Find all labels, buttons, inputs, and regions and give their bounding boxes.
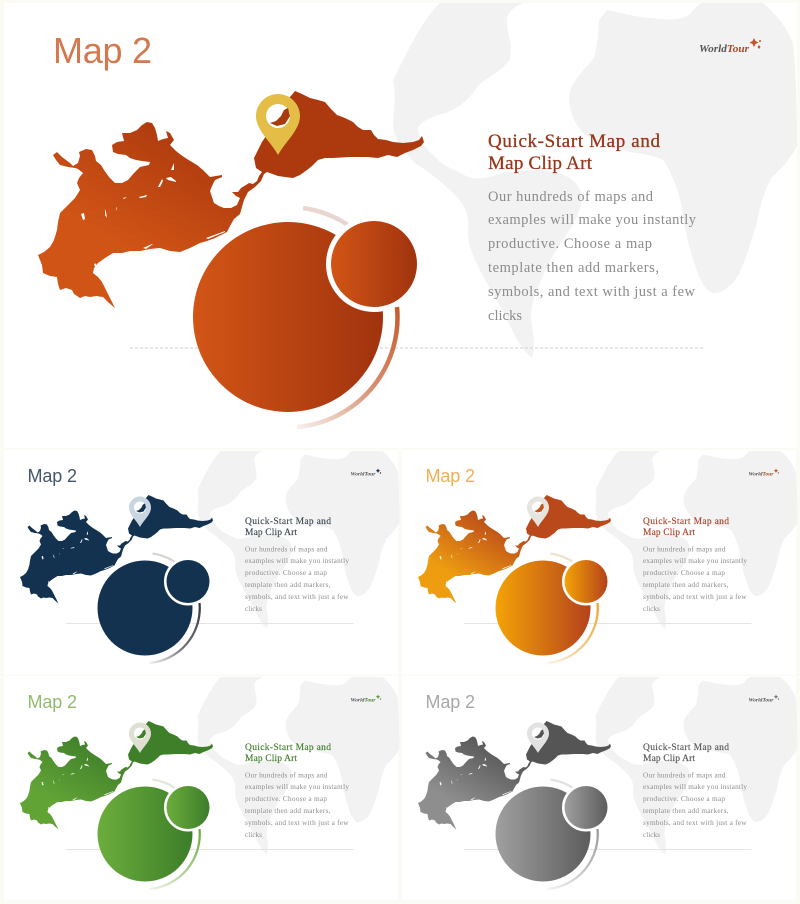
logo <box>350 468 381 478</box>
body text: template then add markers, <box>643 807 729 815</box>
body text: examples will make you instantly <box>245 783 349 791</box>
panel: gray variant <box>402 676 798 900</box>
map <box>418 495 611 604</box>
body text: symbols, and text with just a few <box>488 284 696 300</box>
body text: template then add markers, <box>643 581 729 589</box>
body text: clicks <box>643 831 660 839</box>
heading: Map Clip Art <box>643 754 695 764</box>
panel: large orange-red map slide <box>4 3 797 448</box>
body text: Our hundreds of maps and <box>245 546 328 554</box>
large circle <box>98 786 192 882</box>
logo <box>748 694 779 704</box>
body text: productive. Choose a map <box>643 795 725 803</box>
arc ring <box>150 554 200 663</box>
body text: Our hundreds of maps and <box>488 189 654 205</box>
dashed divider <box>66 622 354 624</box>
title: Map 2 <box>28 692 77 712</box>
arc ring <box>297 208 397 427</box>
background world map <box>198 677 400 854</box>
arc ring <box>150 780 200 889</box>
heading: Quick-Start Map and <box>488 131 660 152</box>
large circle <box>496 786 590 882</box>
dashed divider <box>66 848 354 850</box>
heading: Quick-Start Map and <box>643 517 729 527</box>
body text: template then add markers, <box>245 581 331 589</box>
panel: green variant <box>4 676 400 900</box>
panel: amber variant <box>402 450 798 674</box>
map <box>20 721 213 830</box>
heading: Map Clip Art <box>488 153 593 174</box>
map <box>20 495 213 604</box>
large circle <box>496 560 590 656</box>
body text: symbols, and text with just a few <box>643 819 747 827</box>
panel: navy variant <box>4 450 400 674</box>
logo <box>699 38 761 55</box>
logo <box>748 468 779 478</box>
body text: symbols, and text with just a few <box>245 593 349 601</box>
logo: WorldTour <box>748 472 775 478</box>
map <box>418 721 611 830</box>
body text: clicks <box>245 831 262 839</box>
body text: template then add markers, <box>488 260 659 276</box>
body text: examples will make you instantly <box>488 212 697 228</box>
logo: WorldTour <box>699 44 750 55</box>
body text: Our hundreds of maps and <box>245 772 328 780</box>
body text: examples will make you instantly <box>643 783 747 791</box>
arc ring <box>548 554 598 663</box>
logo: WorldTour <box>350 472 377 478</box>
icon: location pin <box>129 722 151 753</box>
background world map <box>393 3 797 358</box>
body text: productive. Choose a map <box>643 569 725 577</box>
body text: template then add markers, <box>245 807 331 815</box>
heading: Quick-Start Map and <box>245 517 331 527</box>
small circle <box>166 560 210 603</box>
logo <box>350 694 381 704</box>
title: Map 2 <box>426 692 475 712</box>
background world map <box>596 677 798 854</box>
body text: examples will make you instantly <box>643 557 747 565</box>
dashed divider <box>464 848 752 850</box>
small circle <box>564 560 608 603</box>
arc ring <box>548 780 598 889</box>
body text: Our hundreds of maps and <box>643 546 726 554</box>
large circle <box>98 560 192 656</box>
logo: WorldTour <box>748 698 775 704</box>
dashed divider <box>130 347 705 349</box>
title: Map 2 <box>53 30 152 71</box>
body text: Our hundreds of maps and <box>643 772 726 780</box>
dashed divider <box>464 622 752 624</box>
large circle <box>193 222 383 412</box>
body text: clicks <box>643 605 660 613</box>
heading: Map Clip Art <box>245 528 297 538</box>
body text: productive. Choose a map <box>245 569 327 577</box>
icon: location pin <box>256 94 300 155</box>
body text: examples will make you instantly <box>245 557 349 565</box>
body text: productive. Choose a map <box>245 795 327 803</box>
heading: Quick-Start Map and <box>245 743 331 753</box>
background world map <box>198 451 400 628</box>
body text: clicks <box>245 605 262 613</box>
heading: Quick-Start Map and <box>643 743 729 753</box>
heading: Map Clip Art <box>245 754 297 764</box>
heading: Map Clip Art <box>643 528 695 538</box>
icon: location pin <box>527 722 549 753</box>
small circle <box>166 786 210 829</box>
title: Map 2 <box>28 466 77 486</box>
background world map <box>596 451 798 628</box>
title: Map 2 <box>426 466 475 486</box>
small circle <box>331 221 417 307</box>
icon: location pin <box>129 496 151 527</box>
map <box>38 91 424 308</box>
body text: symbols, and text with just a few <box>643 593 747 601</box>
body text: clicks <box>488 308 522 324</box>
icon: location pin <box>527 496 549 527</box>
small circle <box>564 786 608 829</box>
logo: WorldTour <box>350 698 377 704</box>
body text: productive. Choose a map <box>488 236 652 252</box>
body text: symbols, and text with just a few <box>245 819 349 827</box>
